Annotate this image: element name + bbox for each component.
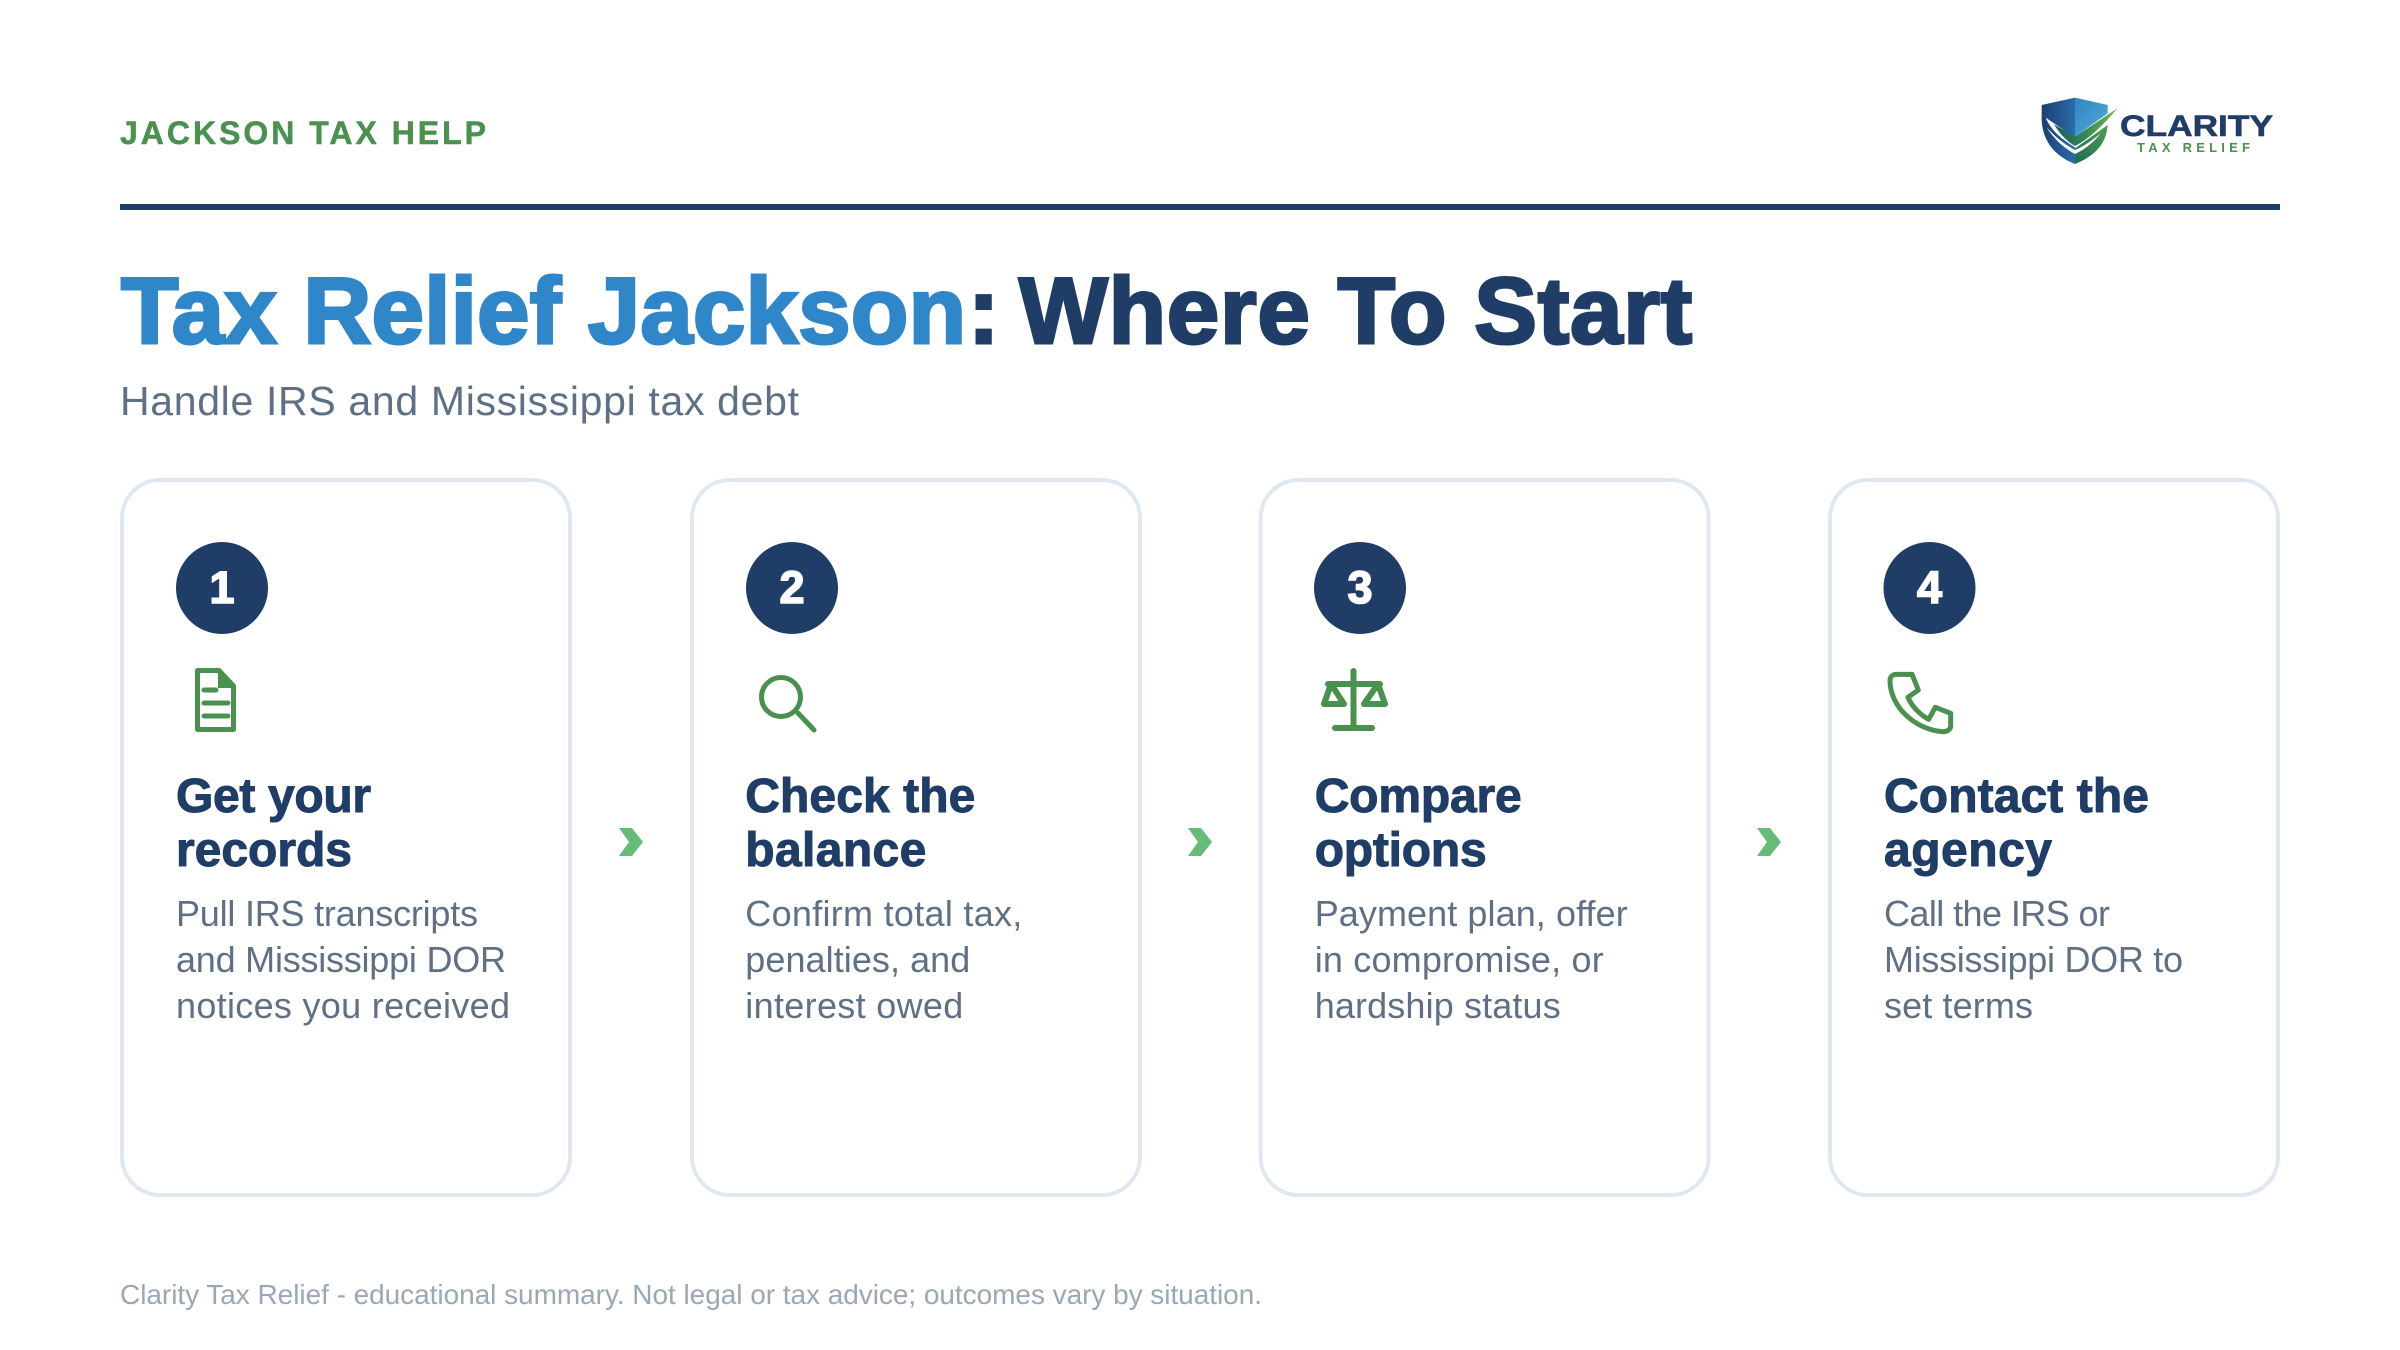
heading: Contact the	[1884, 770, 2149, 823]
description: Mississippi DOR to	[1884, 939, 2183, 980]
heading	[1315, 770, 1522, 877]
logo tagline: TAX RELIEF	[2137, 140, 2250, 155]
description: penalties, and	[745, 939, 970, 980]
heading	[745, 770, 975, 877]
arrow 1	[619, 828, 643, 856]
heading: Compare	[1315, 770, 1522, 823]
icon: magnifier	[762, 678, 814, 730]
number badge 4	[1884, 542, 1976, 634]
description: and Mississippi DOR	[176, 939, 506, 980]
panel: step 2	[692, 480, 1140, 1195]
panel: step 1	[122, 480, 570, 1195]
number badge 4: 4	[1917, 562, 1942, 613]
heading: records	[176, 824, 352, 877]
description: hardship status	[1315, 985, 1561, 1026]
description: notices you received	[176, 985, 510, 1026]
panel: step 3	[1261, 480, 1709, 1195]
number badge 3	[1314, 542, 1406, 634]
logo wordmark: CLARITY	[2120, 110, 2273, 143]
heading: Get your	[176, 770, 371, 823]
description	[176, 893, 510, 1026]
description: Confirm total tax,	[745, 893, 1022, 934]
header rule	[120, 204, 2280, 210]
title	[121, 258, 1692, 363]
description	[1315, 893, 1628, 1026]
title: :	[968, 258, 999, 363]
eyebrow label: JACKSON TAX HELP	[120, 115, 486, 151]
title: Tax Relief Jackson	[121, 258, 966, 363]
heading: balance	[745, 824, 926, 877]
number badge 1	[176, 542, 268, 634]
icon: shield	[2042, 98, 2117, 164]
heading: agency	[1884, 824, 2052, 877]
heading	[1884, 770, 2149, 877]
description: in compromise, or	[1315, 939, 1604, 980]
description: Payment plan, offer	[1315, 893, 1628, 934]
heading	[176, 770, 371, 877]
arrow 3	[1757, 828, 1781, 856]
title: Where To Start	[1019, 258, 1692, 363]
arrow 2	[1188, 828, 1212, 856]
description: set terms	[1884, 985, 2033, 1026]
description	[745, 893, 1022, 1026]
number badge 2	[746, 542, 838, 634]
number badge 2: 2	[779, 562, 805, 613]
logo: Clarity Tax Relief	[2042, 98, 2273, 164]
icon: scales	[1324, 671, 1385, 728]
icon: phone	[1890, 674, 1951, 732]
description: Pull IRS transcripts	[176, 893, 478, 934]
description	[1884, 893, 2183, 1026]
heading: options	[1315, 824, 1487, 877]
icon: document	[198, 669, 236, 730]
heading: Check the	[745, 770, 975, 823]
number badge 3: 3	[1347, 562, 1373, 613]
panel: step 4	[1830, 480, 2278, 1195]
description: interest owed	[745, 985, 963, 1026]
description: Call the IRS or	[1884, 893, 2110, 934]
footer disclaimer: Clarity Tax Relief - educational summary. Not legal or tax advice; outcomes vary by situation.	[120, 1279, 1262, 1310]
number badge 1: 1	[209, 562, 235, 613]
subtitle: Handle IRS and Mississippi tax debt	[120, 378, 800, 424]
